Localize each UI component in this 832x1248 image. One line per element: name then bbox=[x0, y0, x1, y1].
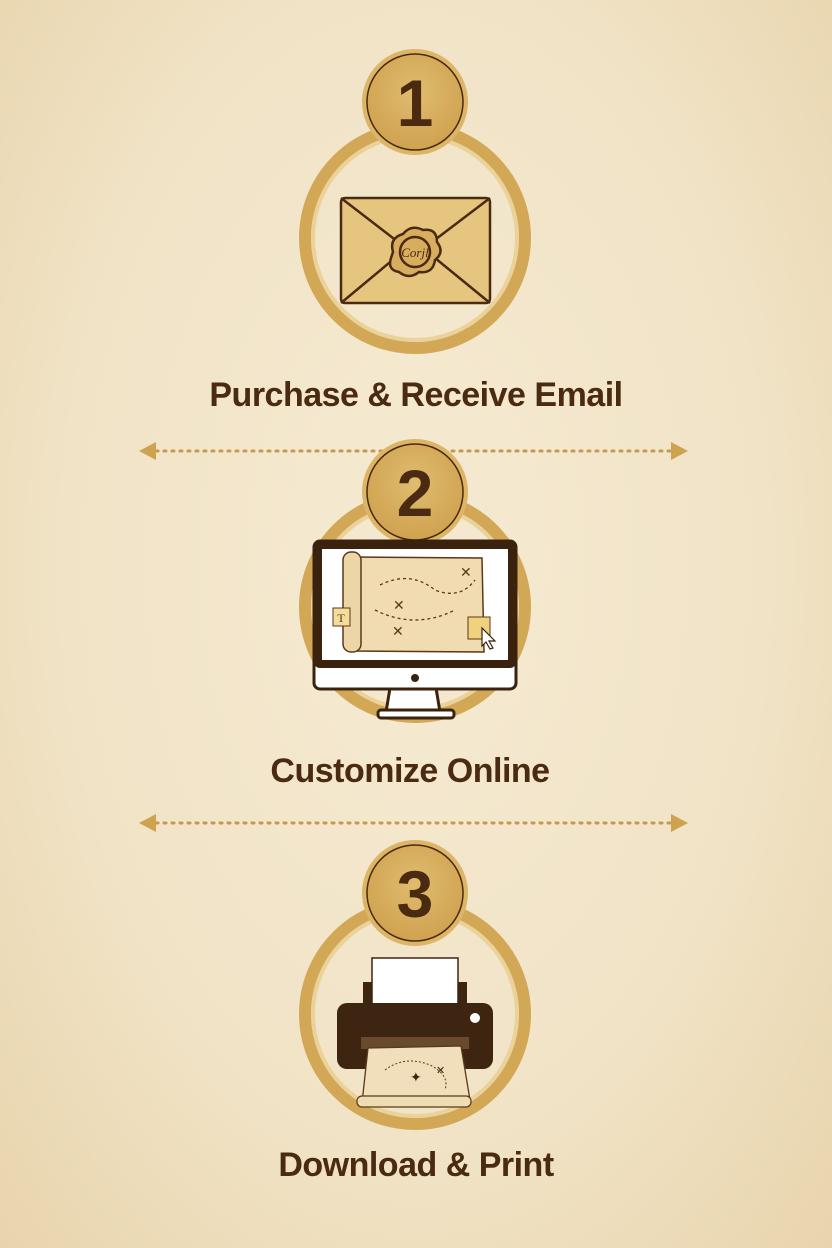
step 1 bbox=[305, 49, 525, 348]
icon: printer with map: ✕ bbox=[436, 1065, 445, 1077]
icon: printer with map: ✦ bbox=[410, 1069, 422, 1085]
label: step 2: Customize Online bbox=[270, 752, 550, 790]
icon: monitor with map: ✕ bbox=[393, 597, 405, 613]
arrow divider 1 bbox=[139, 442, 688, 460]
label: step 1: Purchase & Receive Email bbox=[209, 376, 623, 414]
ring 1 bbox=[305, 128, 525, 348]
badge 2 bbox=[362, 439, 468, 545]
ring 2 bbox=[305, 497, 525, 717]
step 2 bbox=[305, 439, 525, 718]
label: step 3: Download & Print bbox=[278, 1146, 554, 1184]
icon: monitor with map: T bbox=[337, 611, 345, 625]
ring 3 bbox=[305, 904, 525, 1124]
arrow divider 2 bbox=[139, 814, 688, 832]
icon: monitor with map: ✕ bbox=[392, 623, 404, 639]
step 3 bbox=[305, 840, 525, 1124]
icon: monitor with map bbox=[314, 541, 516, 718]
badge 3: 3 bbox=[397, 857, 433, 931]
badge 1: 1 bbox=[397, 66, 433, 140]
icon: envelope with wax seal: Corjl bbox=[401, 245, 429, 260]
badge 1 bbox=[362, 49, 468, 155]
icon: envelope with wax seal bbox=[341, 198, 490, 303]
badge 2: 2 bbox=[397, 456, 433, 530]
icon: printer with map bbox=[337, 958, 493, 1107]
badge 3 bbox=[362, 840, 468, 946]
icon: monitor with map: ✕ bbox=[460, 564, 472, 580]
